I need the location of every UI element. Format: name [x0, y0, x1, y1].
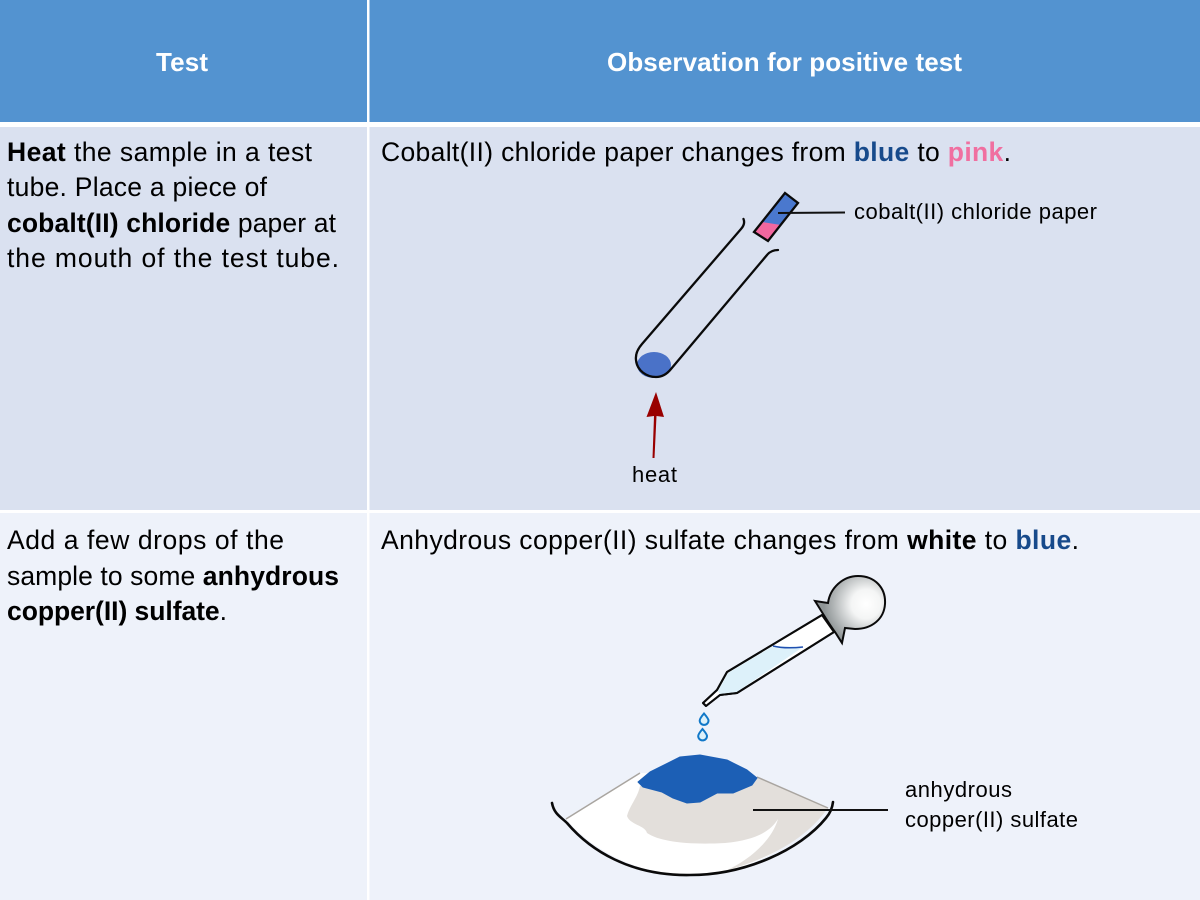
glass edge lines	[703, 615, 834, 706]
text: heat instructions: tube. Place a piece of	[7, 172, 268, 202]
cobalt chloride paper	[754, 193, 798, 241]
diagram: test tube with cobalt paper	[632, 193, 1097, 487]
panel: header observation	[370, 0, 1200, 122]
text: heat instructions	[7, 137, 339, 273]
text: heat instructions: cobalt(II) chloride paper at	[7, 208, 337, 238]
text: heat instructions: Heat the sample in a test	[7, 137, 313, 167]
text: copper sulfate instructions	[7, 525, 339, 626]
water drop 2	[698, 729, 707, 740]
test tube outline	[636, 219, 778, 377]
text: copper sulfate observation: Anhydrous copper(II) sulfate changes from white to blue.	[381, 525, 1079, 555]
grey powder	[627, 777, 828, 871]
label: anhydrous copper sulfate: anhydrous	[905, 777, 1012, 802]
label: anhydrous copper sulfate: copper(II) sulfate	[905, 807, 1078, 832]
blue wet patch	[638, 755, 757, 803]
dish outline	[552, 802, 833, 875]
leader line	[778, 212, 845, 214]
text: cobalt chloride observation: Cobalt(II) chloride paper changes from blue to pink.	[381, 137, 1011, 167]
diagram: dropper	[698, 576, 885, 740]
dropper glass	[703, 615, 834, 706]
panel: row 2 observation	[370, 513, 1200, 900]
panel: row 1 observation	[370, 127, 1200, 510]
powder outline	[566, 773, 828, 819]
heading: test: Test	[156, 47, 208, 77]
text: copper sulfate instructions: Add a few drops of the	[7, 525, 284, 555]
label: cobalt chloride paper: cobalt(II) chloride paper	[854, 199, 1097, 224]
panel: header test	[0, 0, 367, 122]
leader line	[753, 809, 888, 811]
text: copper sulfate instructions: copper(II) sulfate.	[7, 596, 227, 626]
label: heat: heat	[632, 462, 677, 487]
text: copper sulfate instructions: sample to some anhydrous	[7, 561, 339, 591]
heading: observation for positive test: Observation for positive test	[607, 47, 962, 77]
label: anhydrous copper sulfate	[905, 777, 1078, 832]
water drop 1	[700, 714, 708, 725]
panel: row 2 test description	[0, 513, 367, 900]
arrow: heat	[646, 392, 664, 458]
panel: row 1 test description	[0, 127, 367, 510]
dropper bulb	[815, 576, 885, 643]
liquid sample	[637, 352, 671, 378]
text: heat instructions: the mouth of the test tube.	[7, 243, 339, 273]
white powder base	[566, 773, 828, 875]
meniscus	[773, 646, 803, 648]
dropper liquid	[718, 646, 803, 694]
diagram: dish of anhydrous copper sulfate	[552, 755, 1078, 875]
